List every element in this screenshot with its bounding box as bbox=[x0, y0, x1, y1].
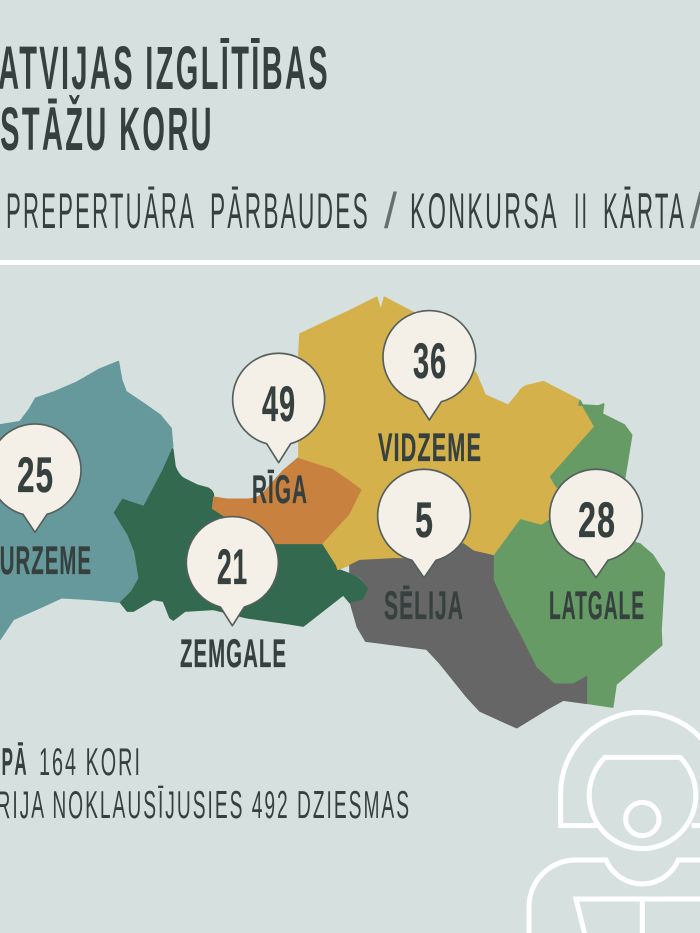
divider bbox=[0, 260, 700, 265]
totals text bbox=[0, 741, 411, 827]
pin: Kurzeme bbox=[0, 424, 81, 532]
number: Latgale: 28 bbox=[578, 492, 616, 548]
map of Latvia regions bbox=[0, 297, 664, 728]
region: Sēlija bbox=[350, 544, 587, 728]
number: Rīga: 49 bbox=[262, 376, 296, 432]
region: Zemgale bbox=[115, 449, 368, 626]
label: Sēlija: SĒLIJA bbox=[384, 584, 464, 628]
number: Vidzeme: 36 bbox=[413, 333, 447, 389]
pin: Sēlija bbox=[378, 469, 470, 578]
region: Kurzeme bbox=[0, 362, 173, 640]
region: Latgale bbox=[495, 401, 664, 707]
pin: Zemgale bbox=[186, 517, 278, 626]
subtitle: PĀRBAUDES bbox=[210, 183, 370, 239]
pin: Vidzeme bbox=[383, 311, 476, 420]
subtitle bbox=[6, 183, 700, 239]
pin: Rīga bbox=[233, 353, 325, 463]
totals text: 164 KORI bbox=[39, 741, 142, 784]
icon: singer with sheet music bbox=[529, 712, 700, 933]
label: Vidzeme: VIDZEME bbox=[378, 426, 482, 470]
number: Kurzeme: 25 bbox=[17, 447, 54, 503]
subtitle: II bbox=[574, 183, 589, 239]
subtitle: / bbox=[384, 183, 397, 239]
subtitle: PREPERTUĀRA bbox=[6, 183, 196, 239]
region: Vidzeme bbox=[299, 297, 594, 569]
label: Zemgale: ZEMGALE bbox=[180, 632, 287, 676]
label: Rīga: RĪGA bbox=[252, 468, 308, 512]
title bbox=[0, 34, 330, 163]
region: Rīga bbox=[213, 458, 363, 543]
number: Sēlija: 5 bbox=[415, 492, 433, 548]
pin: Latgale bbox=[550, 469, 642, 578]
number: Zemgale: 21 bbox=[217, 539, 248, 595]
